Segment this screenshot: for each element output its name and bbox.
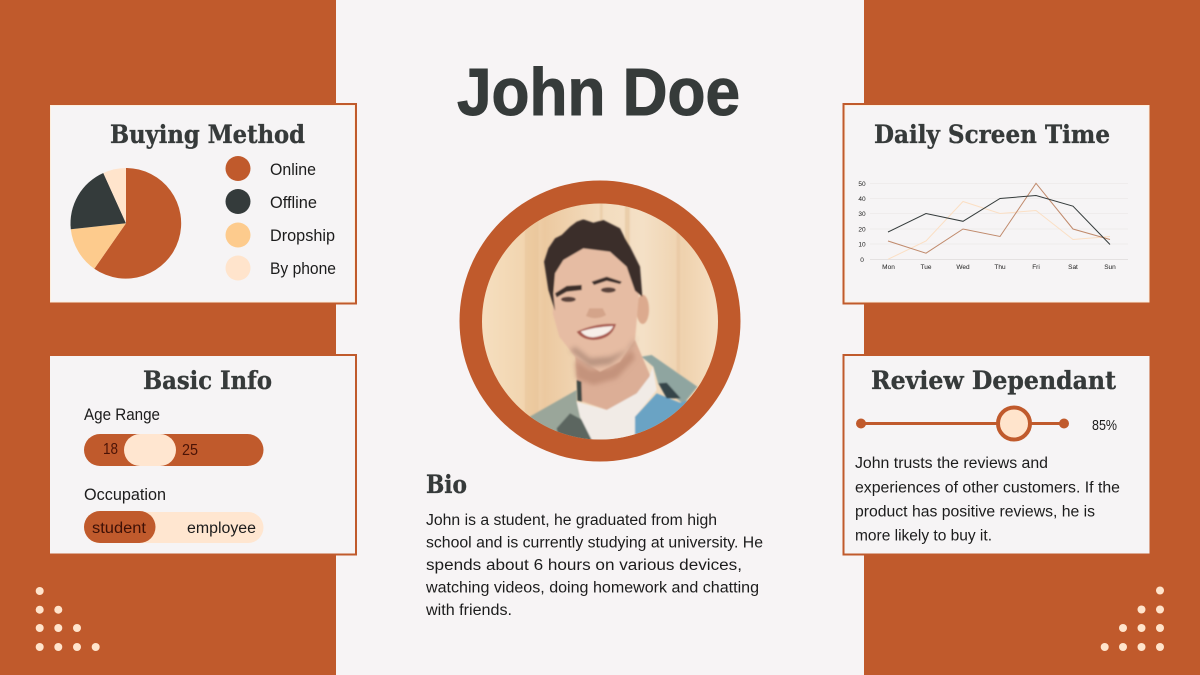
heading: review dependant: Review Dependant: [871, 366, 1116, 395]
heading: bio: Bio: [426, 470, 467, 499]
bio text: John is a student, he graduated from high: [426, 512, 717, 529]
occupation label: Occupation: [84, 486, 166, 504]
hair: [544, 219, 642, 311]
legend: [226, 156, 336, 280]
line chart: Tue: [921, 264, 932, 271]
percentage: 85%: [1092, 417, 1117, 434]
line chart: 50: [858, 181, 866, 188]
review text: experiences of other customers. If the: [855, 480, 1120, 496]
age range toggle: 25: [182, 442, 198, 459]
bio text: watching videos, doing homework and chatting: [425, 580, 759, 596]
panel: buying method: [49, 104, 356, 304]
t-shirt: [577, 367, 657, 443]
line chart: Wed: [956, 264, 970, 271]
line chart: [858, 181, 1128, 271]
review text: [855, 455, 1120, 544]
neck: [575, 340, 651, 410]
line chart: Mon: [882, 264, 895, 271]
legend: Online: [270, 161, 316, 179]
dots left: [36, 587, 100, 651]
occupation toggle: employee: [187, 520, 256, 537]
age range toggle: [84, 434, 264, 466]
slider: [856, 408, 1069, 440]
shirt left: [530, 390, 582, 432]
occupation toggle: student: [92, 520, 147, 537]
heading: buying method: Buying Method: [110, 120, 305, 149]
stubble: [570, 341, 634, 368]
bio text: school and is currently studying at university. He: [426, 534, 763, 552]
pie chart: [70, 168, 181, 279]
line chart: 10: [858, 242, 866, 248]
heading: daily screen time: Daily Screen Time: [874, 120, 1110, 149]
occupation toggle: [84, 511, 264, 543]
line chart: 20: [858, 226, 866, 234]
review text: more likely to buy it.: [855, 528, 992, 544]
nose shadow: [586, 308, 606, 318]
age range label: Age Range: [84, 406, 160, 424]
bio text: spends about 6 hours on various devices,: [426, 557, 742, 574]
bio text: with friends.: [425, 602, 512, 619]
shirt right: [642, 355, 697, 404]
title: John Doe: [457, 55, 740, 130]
mouth: [577, 324, 616, 340]
panel: daily screen time: [844, 104, 1150, 304]
dots right: [1101, 586, 1164, 651]
review text: John trusts the reviews and: [855, 455, 1048, 472]
line chart: 0: [860, 257, 864, 264]
line chart: Sat: [1068, 264, 1078, 271]
bio text: [425, 512, 763, 619]
line chart: Fri: [1032, 264, 1040, 271]
panel: basic info: [49, 355, 356, 554]
heading: basic info: Basic Info: [143, 366, 272, 395]
review text: product has positive reviews, he is: [855, 504, 1095, 520]
ear: [636, 295, 649, 324]
face: [553, 248, 639, 372]
brows: [555, 285, 582, 297]
legend: Dropship: [270, 227, 335, 245]
line chart: Thu: [994, 264, 1006, 271]
panel: review dependant: [844, 355, 1150, 554]
legend: By phone: [270, 260, 336, 278]
legend: Offline: [270, 194, 317, 212]
center column: [336, 0, 864, 675]
line chart: 40: [858, 196, 866, 203]
line chart: 30: [858, 211, 866, 218]
age range toggle: 18: [103, 441, 118, 458]
portrait: [460, 180, 740, 462]
eyes: [561, 297, 576, 302]
line chart: Sun: [1104, 264, 1116, 271]
